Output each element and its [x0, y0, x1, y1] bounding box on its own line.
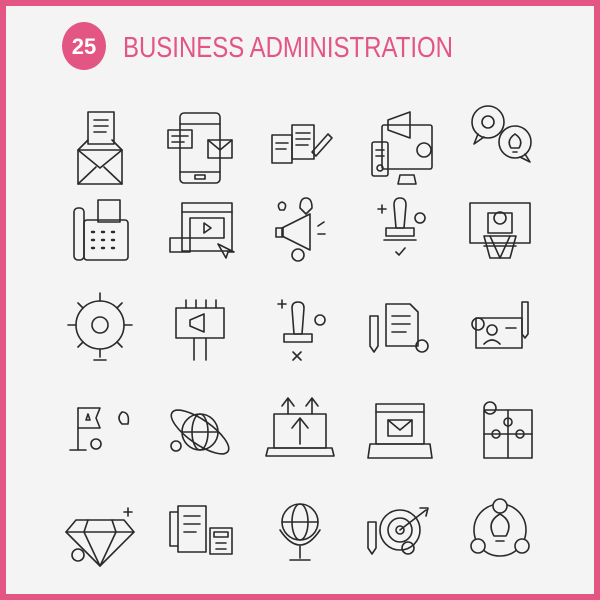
- icon: documents calculator: [170, 506, 232, 554]
- icon: fax machine: [74, 200, 128, 260]
- icon: team bulb: [471, 499, 529, 556]
- icon: envelope with letter: [78, 112, 122, 184]
- icon: basketball hoop: [470, 203, 530, 258]
- icon: globe on stand: [280, 504, 320, 560]
- icon: billboard megaphone: [176, 300, 224, 360]
- badge: 25: [62, 22, 106, 70]
- icon: stamp with gear: [378, 198, 425, 255]
- icon: laptop with arrows: [266, 398, 334, 456]
- badge: 25: 25: [72, 34, 96, 59]
- icon: megaphone with pin and bulb: [276, 198, 325, 261]
- icon: diamond: [66, 508, 134, 566]
- icon: stamp with x: [278, 300, 325, 360]
- icon: globe orbit: [165, 403, 235, 461]
- icon: laptop mail: [368, 404, 432, 458]
- icon: smartphone messages: [168, 113, 232, 183]
- icon: video browser: [170, 203, 234, 258]
- icon: gear bulb: [68, 293, 132, 360]
- icon: documents and pen: [272, 125, 332, 163]
- icon: flag bulb gear: [70, 408, 128, 450]
- icon: target arrow: [368, 508, 428, 554]
- icon: chat gear and bulb: [472, 106, 531, 162]
- icon: megaphone monitor remote: [372, 112, 432, 184]
- icon: id card pencil gear: [472, 302, 528, 348]
- icon: puzzle: [484, 402, 532, 458]
- title: BUSINESS ADMINISTRATION: [123, 32, 453, 64]
- icon: document pencil gear: [370, 304, 428, 352]
